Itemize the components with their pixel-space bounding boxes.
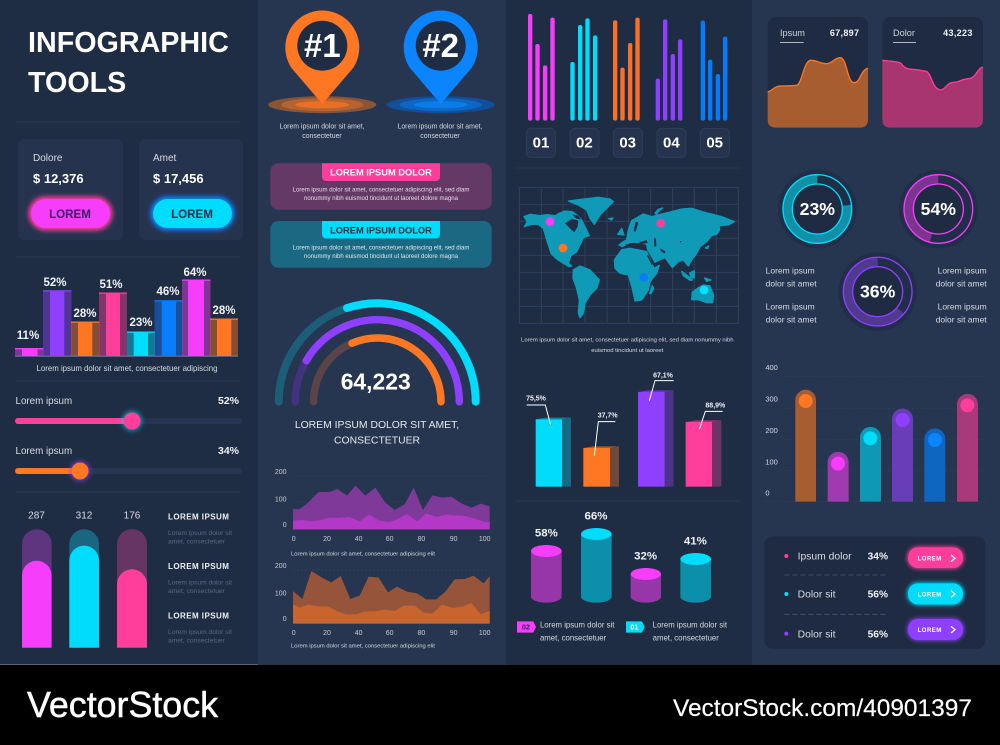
panel: Amet card — [139, 139, 243, 240]
pin captions: Lorem ipsum dolor sit amet, — [397, 124, 483, 130]
cylinder chart: 41% — [684, 535, 707, 547]
legend: cylinder chart: Lorem ipsum dolor sit — [653, 621, 728, 630]
panel: Ipsum area card — [768, 17, 868, 128]
panel: Amet card: LOREM — [171, 208, 213, 221]
donut: 36%: 36% — [860, 282, 896, 302]
panel: Ipsum area card: Ipsum — [780, 28, 805, 38]
bar chart: lollipop columns: 100 — [765, 457, 778, 466]
area chart: purple — [275, 469, 491, 557]
panel: Dolor area card: 43,223 — [943, 28, 973, 38]
legend: cylinder chart — [517, 621, 728, 643]
legend: rounded bars: Lorem ipsum dolor sit — [168, 629, 232, 636]
area chart: orange: 60 — [386, 630, 394, 637]
map caption — [521, 338, 734, 354]
chart: vertical line groups 01-05 — [526, 14, 729, 157]
map caption: euismod tincidunt ut laoreet — [591, 348, 664, 354]
area chart: purple: 100 — [479, 536, 491, 543]
panel: pink banner: LOREM IPSUM DOLOR — [330, 167, 432, 177]
area chart: purple: 60 — [386, 536, 394, 543]
3D bar chart with callouts: 75,5% — [526, 396, 547, 403]
footer: watermark bar — [0, 664, 1000, 745]
panel: list with buttons: 56% — [868, 590, 888, 601]
cylinder chart: 66% — [584, 511, 607, 523]
slider: 52%: Lorem ipsum — [16, 396, 72, 407]
gauge: 64,223: 64,223 — [341, 368, 411, 394]
bar chart: lollipop columns: 300 — [765, 395, 778, 404]
panel: list with buttons: Dolor sit — [798, 590, 836, 601]
donut side labels: Lorem ipsum — [766, 302, 815, 312]
icon: map pin #1: #1 — [304, 27, 341, 64]
icon: map pin #2 — [387, 10, 495, 113]
area chart: purple: 80 — [417, 536, 425, 543]
legend: rounded bars: amet, consectetuer — [168, 638, 226, 644]
area chart: purple: Lorem ipsum dolor sit amet, consectetuer adipiscing elit — [291, 551, 435, 557]
bar chart: percentages: 64% — [183, 267, 207, 279]
area chart: orange — [275, 563, 491, 649]
panel: list with buttons: LOREM — [918, 592, 942, 598]
title: INFOGRAPHIC — [28, 27, 229, 59]
panel: Dolore card: Dolore — [33, 153, 63, 164]
bar chart: percentages: 46% — [156, 286, 180, 298]
bar chart: lollipop columns — [765, 363, 987, 502]
legend: rounded bars: amet, consectetuer — [168, 538, 226, 546]
donut side labels: dolor sit amet — [766, 278, 817, 288]
legend: rounded bars: Lorem ipsum dolor sit — [168, 580, 232, 586]
cylinder chart — [531, 511, 711, 603]
bar chart: lollipop columns: 400 — [765, 363, 778, 372]
area chart: orange: 0 — [292, 630, 296, 637]
gauge caption — [295, 420, 459, 447]
panel: list with buttons: Ipsum dolor — [798, 552, 852, 563]
panel: cyan banner: Lorem ipsum dolor sit amet, consectetuer adipiscing elit, sed diam — [293, 246, 469, 252]
footer: watermark bar: VectorStock — [27, 685, 218, 725]
gauge caption: LOREM IPSUM DOLOR SIT AMET, — [295, 420, 459, 431]
area chart: purple: 200 — [275, 469, 287, 476]
chart: vertical line groups 01-05: 03 — [619, 135, 636, 152]
slider: 34%: Lorem ipsum — [16, 446, 72, 457]
legend: cylinder chart: amet, consectetuer — [653, 634, 719, 643]
donut: 36% — [838, 252, 917, 331]
pin captions: Lorem ipsum dolor sit amet, — [279, 124, 365, 130]
bar chart: percentages: 28% — [212, 305, 236, 317]
chart: vertical line groups 01-05: 04 — [663, 135, 680, 152]
gauge: 64,223 — [279, 303, 476, 402]
3D bar chart with callouts — [526, 372, 726, 487]
panel: Ipsum area card: 67,897 — [830, 28, 859, 38]
area chart: orange: 40 — [355, 630, 363, 637]
donut side labels: Lorem ipsum — [938, 302, 987, 312]
panel: cyan banner: LOREM IPSUM DOLOR — [330, 225, 432, 235]
rounded bars: 287, 312, 176: 176 — [124, 511, 141, 522]
legend: rounded bars: amet, consectetuer — [168, 588, 226, 595]
rounded bars: 287, 312, 176: 312 — [76, 511, 93, 522]
donut side labels: Lorem ipsum — [938, 266, 987, 276]
bar chart: percentages: 28% — [73, 308, 97, 320]
pin captions: consectetuer — [420, 133, 460, 140]
area chart: orange: 0 — [283, 616, 287, 623]
3D bar chart with callouts: 88,9% — [705, 403, 726, 410]
chart: vertical line groups 01-05: 05 — [706, 135, 723, 152]
panel: Amet card: $ 17,456 — [153, 171, 204, 186]
bar chart: percentages: 23% — [129, 317, 153, 329]
bar chart: lollipop columns: 200 — [765, 426, 778, 435]
cylinder chart: 32% — [634, 551, 657, 563]
bar chart caption: Lorem ipsum dolor sit amet, consectetuer adipiscing — [37, 364, 217, 373]
chart: vertical line groups 01-05: 02 — [576, 135, 593, 152]
rounded bars: 287, 312, 176: 287 — [28, 511, 45, 522]
panel: Dolor area card: Dolor — [893, 28, 915, 38]
donut side labels: dolor sit amet — [766, 314, 817, 324]
panel: list with buttons: LOREM — [918, 628, 942, 634]
title — [28, 27, 229, 99]
area chart: orange: Lorem ipsum dolor sit amet, consectetuer adipiscing elit — [291, 643, 435, 649]
bar chart: lollipop columns: 0 — [765, 489, 770, 498]
donut side labels: dolor sit amet — [936, 314, 987, 324]
panel: list with buttons: LOREM — [918, 556, 942, 562]
area chart: orange: 200 — [275, 563, 287, 570]
icon: map pin #1 — [268, 10, 376, 113]
panel: list with buttons: 56% — [868, 629, 888, 640]
area chart: orange: 100 — [479, 630, 491, 637]
panel: list with buttons: Dolor sit — [798, 629, 836, 640]
rounded bars: 287, 312, 176 — [22, 511, 147, 648]
panel: Dolore card — [18, 139, 123, 240]
footer: watermark bar: VectorStock.com/40901397 — [673, 695, 972, 722]
3D bar chart with callouts: 37,7% — [598, 412, 618, 419]
gauge caption: CONSECTETUER — [334, 436, 420, 447]
panel: cyan banner: nonummy nibh euismod tincidunt ut laoreet dolore magna — [304, 254, 459, 260]
panel: pink banner — [270, 163, 492, 210]
donut side labels: dolor sit amet — [936, 278, 987, 288]
map: world with location dots — [519, 187, 738, 323]
bar chart: percentages: 52% — [43, 277, 67, 289]
bar chart: percentages — [15, 267, 238, 357]
pin captions — [279, 124, 483, 140]
donut: 54%: 54% — [921, 199, 956, 219]
donut: 23%: 23% — [800, 199, 835, 219]
area chart: purple: 90 — [450, 536, 458, 543]
title: TOOLS — [28, 67, 126, 99]
panel: list with buttons — [764, 537, 985, 649]
slider: 52%: 52% — [218, 395, 240, 407]
area chart: purple: 0 — [292, 536, 296, 543]
legend: cylinder chart: 02 — [522, 623, 530, 632]
legend: rounded bars: Lorem ipsum dolor sit — [168, 530, 232, 537]
slider: 34% — [15, 445, 242, 481]
area chart: orange: 90 — [450, 630, 458, 637]
legend: rounded bars: LOREM IPSUM — [168, 612, 229, 620]
map caption: Lorem ipsum dolor sit amet, consectetuer adipiscing elit, sed diam nonummy nibh — [521, 338, 734, 344]
pin captions: consectetuer — [302, 133, 342, 140]
area chart: purple: 0 — [283, 522, 287, 529]
panel: list with buttons: 34% — [868, 552, 888, 563]
area chart: orange: 80 — [417, 630, 425, 637]
donut: 54% — [899, 170, 978, 248]
legend: cylinder chart: 01 — [630, 623, 638, 632]
panel: Amet card: Amet — [153, 153, 177, 164]
icon: map pin #2: #2 — [422, 27, 459, 64]
bar chart: percentages: 51% — [99, 279, 123, 291]
panel: pink banner: nonummy nibh euismod tincidunt ut laoreet dolore magna — [304, 196, 459, 202]
panel: Dolore card: $ 12,376 — [33, 171, 84, 186]
legend: cylinder chart: Lorem ipsum dolor sit — [540, 621, 615, 630]
area chart: purple: 20 — [323, 536, 331, 543]
slider: 34%: 34% — [218, 445, 240, 457]
donut: 23% — [778, 170, 857, 248]
donut side labels — [766, 266, 987, 324]
area chart: orange: 100 — [275, 591, 287, 598]
legend: rounded bars: LOREM IPSUM — [168, 512, 229, 522]
legend: cylinder chart: amet, consectetuer — [540, 634, 607, 643]
panel: Dolore card: LOREM — [49, 208, 91, 221]
area chart: purple: 100 — [275, 497, 287, 504]
bar chart: percentages: 11% — [17, 330, 39, 342]
legend: rounded bars — [168, 512, 232, 644]
panel: pink banner: Lorem ipsum dolor sit amet, consectetuer adipiscing elit, sed diam — [293, 188, 469, 194]
chart: vertical line groups 01-05: 01 — [533, 135, 549, 152]
slider: 52% — [15, 395, 242, 431]
legend: rounded bars: LOREM IPSUM — [168, 562, 229, 571]
panel: cyan banner — [270, 221, 492, 268]
donut side labels: Lorem ipsum — [766, 266, 815, 276]
area chart: purple: 40 — [355, 536, 363, 543]
area chart: orange: 20 — [323, 630, 331, 637]
cylinder chart: 58% — [535, 528, 558, 540]
panel: Dolor area card — [882, 17, 983, 128]
3D bar chart with callouts: 67,1% — [653, 372, 674, 379]
